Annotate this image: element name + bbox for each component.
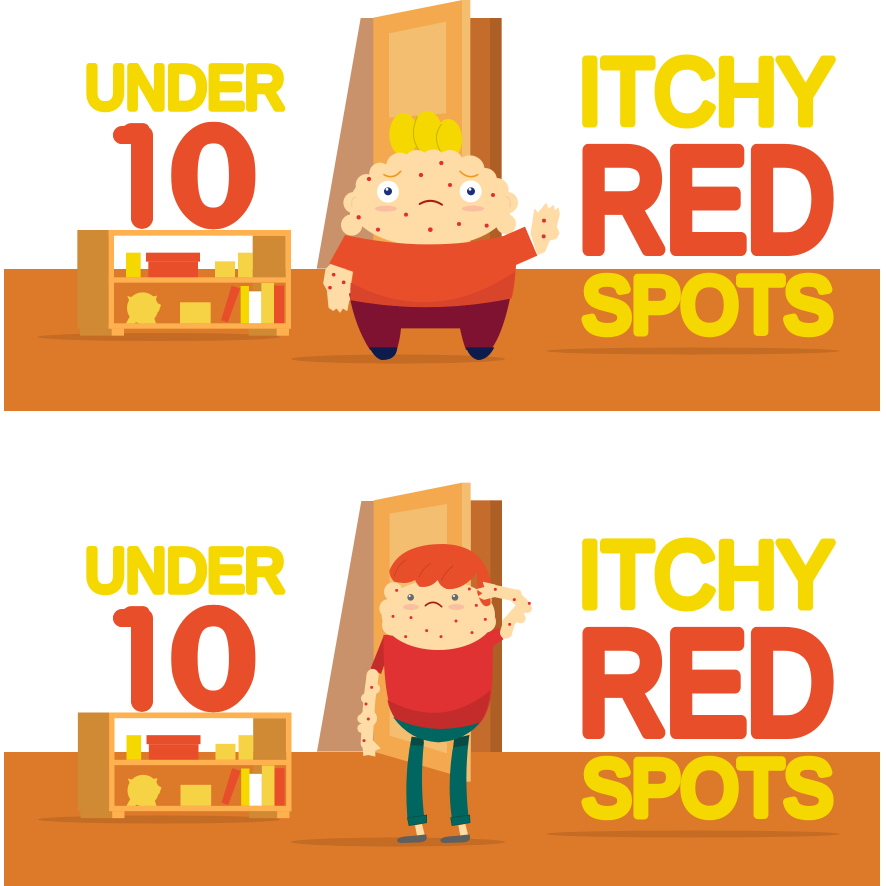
heading: 10 <box>113 122 256 230</box>
face <box>377 181 399 203</box>
left arm <box>357 671 381 757</box>
shoes <box>369 347 494 360</box>
right arm <box>477 582 532 637</box>
heading: red: RED <box>578 120 834 280</box>
red spots <box>362 587 531 742</box>
head <box>379 580 496 650</box>
left sleeve <box>371 637 387 674</box>
heading: spots: SPOTS <box>582 260 833 349</box>
heading: itchy: ITCHY <box>578 522 834 626</box>
door leaf <box>374 483 471 782</box>
shirt <box>383 630 493 729</box>
legs <box>406 735 469 817</box>
character shadow <box>291 838 505 846</box>
heading: under: UNDER <box>85 54 285 122</box>
bookshelf <box>37 230 291 341</box>
ankles <box>415 824 469 837</box>
floor <box>4 269 880 411</box>
text shadow <box>546 348 840 354</box>
character shadow <box>291 354 505 364</box>
hair <box>389 544 491 606</box>
hair <box>389 111 462 160</box>
hands <box>324 265 354 312</box>
icon: piggy bank <box>126 292 161 324</box>
face <box>407 594 414 601</box>
heading: 10 <box>113 604 256 712</box>
text shadow <box>546 830 840 838</box>
character: thin child <box>357 544 532 843</box>
panel: bottom scene <box>4 483 880 886</box>
door leaf <box>373 0 470 299</box>
heading: under: UNDER <box>85 536 285 604</box>
heading: 10: 10 <box>92 584 255 734</box>
red spots <box>328 161 546 289</box>
shirt <box>329 227 537 307</box>
shoes <box>397 834 470 843</box>
character: round child <box>324 111 559 360</box>
head <box>341 149 518 247</box>
door <box>317 500 502 753</box>
trousers <box>349 293 511 350</box>
trousers <box>393 713 483 742</box>
floor <box>4 752 880 886</box>
heading: red: RED <box>578 602 834 764</box>
icon: piggy bank <box>126 775 161 806</box>
shelf shadow <box>38 815 280 823</box>
heading: 10: 10 <box>92 101 255 251</box>
door <box>317 18 502 269</box>
panel: top scene <box>4 0 880 411</box>
shelf shadow <box>37 333 280 341</box>
bookshelf <box>38 712 291 823</box>
heading: spots: SPOTS <box>582 743 833 832</box>
heading: itchy: ITCHY <box>578 40 834 144</box>
